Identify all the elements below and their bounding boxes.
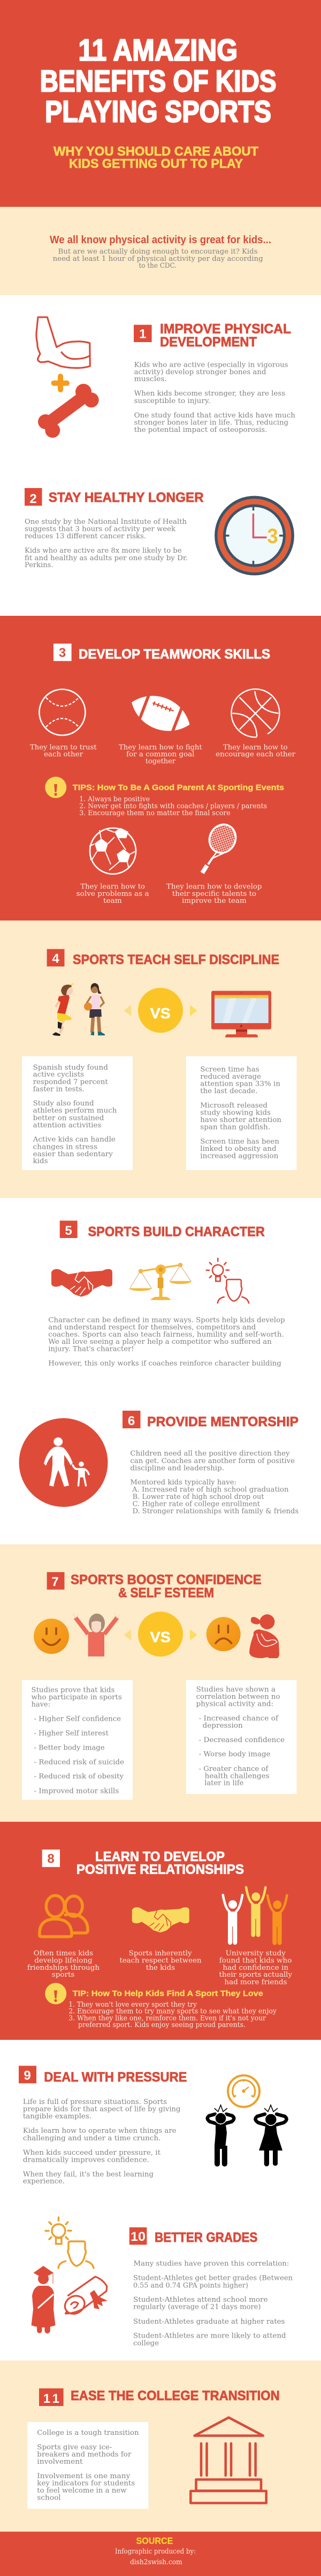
card: sports facts: responded 7 percent bbox=[33, 1078, 108, 1086]
number badge 4: 4 bbox=[52, 952, 59, 966]
card: screen time facts: span than goldfish. bbox=[200, 1124, 270, 1131]
intro text: need at least 1 hour of physical activity per day according bbox=[53, 255, 263, 263]
icon: diploma bbox=[62, 2277, 108, 2317]
number badge 3: 3 bbox=[59, 646, 66, 660]
text block 10: Many studies have proven this correlation: bbox=[134, 2260, 289, 2268]
number badge 6 bbox=[123, 1411, 140, 1428]
captions: teach respect between bbox=[120, 1956, 202, 1964]
heading 7: SPORTS BOOST CONFIDENCE bbox=[71, 1572, 262, 1587]
card: college facts bbox=[27, 2422, 148, 2509]
captions row 2 bbox=[77, 883, 262, 905]
text block 10: Student-Athletes graduate at higher rates bbox=[133, 2318, 285, 2326]
number badge 7 bbox=[47, 1572, 64, 1590]
number badge 8 bbox=[42, 1850, 60, 1867]
card: sports facts: attention activities bbox=[33, 1121, 101, 1130]
source credit: dish2swish.com bbox=[130, 2558, 182, 2566]
icon: tip alert bbox=[45, 1983, 66, 2005]
icon: college building bbox=[190, 2417, 266, 2503]
number badge 1: 1 bbox=[139, 327, 146, 341]
icon: baseball bbox=[39, 690, 85, 736]
text block 6: D. Stronger relationships with family & friends bbox=[133, 1507, 299, 1515]
text block 10: 0.55 and 0.74 GPA points higher) bbox=[133, 2281, 248, 2289]
number badge 5: 5 bbox=[65, 1224, 72, 1238]
icon: plus bbox=[54, 376, 67, 390]
VS badge bbox=[138, 988, 183, 1033]
captions row 2: team bbox=[103, 897, 122, 905]
icon: girl with ball bbox=[84, 983, 105, 1035]
card: college facts: breakers and methods for bbox=[37, 2450, 132, 2458]
number badge 10 bbox=[129, 2227, 147, 2245]
captions bbox=[27, 1950, 293, 1986]
text block 2: One study by the National Institute of Health bbox=[25, 518, 187, 526]
icon: stressed man bbox=[208, 2105, 234, 2167]
heading 6: PROVIDE MENTORSHIP bbox=[147, 1414, 299, 1429]
card: sports facts: changes in stress bbox=[33, 1143, 97, 1151]
text block 5: We all love seeing a player help a competitor who suffered an bbox=[48, 1338, 272, 1346]
icon: handshake bbox=[132, 1907, 189, 1932]
heading 3: DEVELOP TEAMWORK SKILLS bbox=[79, 647, 270, 662]
number badge 2: 2 bbox=[29, 492, 37, 506]
number badge 9 bbox=[19, 2066, 36, 2083]
captions row 2: They learn how to develop bbox=[166, 883, 262, 891]
icon: handshake bbox=[51, 1269, 112, 1297]
icon: pressure gauge bbox=[228, 2075, 259, 2107]
text block 5: However, this only works if coaches reinforce character building bbox=[48, 1360, 281, 1367]
panel: section 4 self discipline bbox=[0, 920, 321, 1198]
captions row 1: encourage each other bbox=[216, 751, 296, 759]
icon: cheering group bbox=[223, 1887, 287, 1945]
icon: clock bbox=[215, 496, 294, 575]
icon: running boy bbox=[52, 984, 73, 1036]
text block 10: regularly (average of 21 days more) bbox=[133, 2303, 261, 2311]
captions row 1: They learn how to fight bbox=[119, 744, 202, 752]
text block 5: coaches. Sports can also teach fairness, humility and self-worth. bbox=[48, 1330, 284, 1339]
icon: balance scales bbox=[129, 1263, 192, 1300]
heading 8 bbox=[77, 1850, 244, 1877]
text block 10: Student-Athletes attend school more bbox=[133, 2296, 268, 2304]
text block 9: tangible examples. bbox=[23, 2113, 91, 2121]
text block 6: can get. Coaches are another form of positive bbox=[130, 1457, 295, 1465]
icon: american football bbox=[125, 684, 196, 742]
subtitle: WHY YOU SHOULD CARE ABOUT bbox=[54, 144, 258, 159]
title: BENEFITS OF KIDS bbox=[40, 64, 277, 98]
panel: section 3 teamwork skills bbox=[0, 616, 321, 920]
card: inactivity risks: health challenges bbox=[205, 1772, 270, 1780]
tips heading: TIPS: How To Be A Good Parent At Sporting Events bbox=[73, 783, 284, 792]
text block 9: experience. bbox=[23, 2178, 65, 2186]
text block 9: challenging and under a time crunch. bbox=[23, 2134, 160, 2142]
icon: sad face bbox=[207, 1617, 241, 1651]
captions row 2: They learn how to bbox=[80, 883, 145, 891]
text block 6: Children need all the positive direction they bbox=[130, 1450, 290, 1458]
icon: flexed arm bbox=[36, 317, 90, 368]
card: sports benefits: - Reduced risk of suicide bbox=[34, 1758, 124, 1766]
VS badge: VS bbox=[150, 1629, 171, 1645]
text block 10: Student-Athletes get better grades (Between bbox=[133, 2275, 293, 2283]
text block 9: When kids succeed under pressure, it bbox=[23, 2149, 161, 2157]
card: college facts: Involvement is one many bbox=[37, 2472, 131, 2480]
card: screen time facts: have shorter attention bbox=[200, 1116, 282, 1124]
card: inactivity risks: - Decreased confidence bbox=[199, 1736, 285, 1744]
text block 1: the potential impact of osteoporosis. bbox=[134, 426, 267, 434]
icon: bone bbox=[38, 384, 99, 438]
card: college facts: Sports give easy ice- bbox=[37, 2443, 112, 2451]
card: inactivity risks: Studies have shown a bbox=[196, 1686, 276, 1694]
text block 1: One study found that active kids have much bbox=[134, 412, 296, 420]
tip heading: TIP: How To Help Kids Find A Sport They Love bbox=[73, 1989, 263, 1998]
card: sports facts bbox=[22, 1056, 133, 1170]
tips list: 1. Always be positive bbox=[79, 795, 150, 803]
icon: monitor bbox=[211, 991, 271, 1038]
captions row 2: their specific talents to bbox=[172, 890, 256, 898]
captions row 1: They learn to trust bbox=[30, 744, 97, 752]
icon: idea head bbox=[207, 1258, 249, 1303]
captions: had more friends bbox=[224, 1978, 287, 1986]
text block 9: prepare kids for that aspect of life by giving bbox=[23, 2105, 181, 2114]
text block 5: injury. That's character! bbox=[48, 1345, 134, 1353]
card: college facts: to feel welcome in a new bbox=[37, 2487, 127, 2495]
intro heading: We all know physical activity is great for kids... bbox=[50, 234, 271, 246]
tip list: preferred sport. Kids enjoy seeing proud parents. bbox=[78, 2021, 246, 2029]
card: sports benefits: - Reduced risk of obesity bbox=[34, 1773, 124, 1781]
text block 9: dramatically improves confidence. bbox=[23, 2156, 149, 2164]
card: college facts: key indicators for students bbox=[37, 2479, 135, 2488]
intro text: to the CDC. bbox=[139, 262, 177, 270]
panel: section 8 relationships bbox=[0, 1822, 321, 2040]
arrow: right bbox=[190, 1005, 197, 1016]
heading 1 bbox=[160, 322, 291, 350]
card: sports facts: Spanish study found bbox=[33, 1064, 108, 1072]
card: sports benefits: have: bbox=[31, 1700, 50, 1708]
captions: found that kids who bbox=[219, 1956, 292, 1964]
number badge 7: 7 bbox=[51, 1575, 59, 1589]
VS badge: VS bbox=[150, 1005, 171, 1022]
icon: crouching person bbox=[249, 1614, 279, 1658]
card: screen time facts: increased aggression bbox=[200, 1152, 279, 1160]
text block 9: When they fail, it's the best learning bbox=[23, 2170, 154, 2178]
icon: cheering girl bbox=[73, 1613, 120, 1657]
text block 2: fit and healthy as adults per one study by Dr. bbox=[25, 554, 188, 562]
captions row 1: They learn how to bbox=[223, 744, 288, 752]
panel: sections 5 and 6 bbox=[0, 1198, 321, 1544]
card: screen time facts: reduced average bbox=[200, 1073, 261, 1081]
icon: graduate bbox=[31, 2266, 56, 2333]
card: screen time facts bbox=[186, 1056, 296, 1170]
tips list: 3. Encourage them no matter the final score bbox=[79, 809, 231, 817]
card: sports benefits: - Improved motor skills bbox=[34, 1788, 119, 1795]
number badge 6: 6 bbox=[128, 1414, 135, 1428]
captions row 1: together bbox=[146, 757, 176, 765]
text block 6: C. Higher rate of college enrollment bbox=[133, 1500, 261, 1508]
captions: Sports inherently bbox=[129, 1950, 192, 1958]
icon: soccer ball bbox=[89, 828, 136, 874]
VS badge bbox=[138, 1612, 183, 1657]
text block 6 bbox=[130, 1450, 299, 1515]
number badge 11: 11 bbox=[43, 2392, 59, 2406]
captions: friendships through bbox=[27, 1964, 100, 1972]
number badge 9: 9 bbox=[24, 2069, 31, 2083]
text block 1: stronger bones later in life. Thus, reducing bbox=[134, 419, 288, 427]
tips list: 2. Never get into fights with coaches / players / parents bbox=[79, 802, 267, 810]
number badge 10: 10 bbox=[131, 2230, 146, 2244]
icon: basketball bbox=[231, 689, 279, 737]
icon: tennis racket bbox=[202, 820, 240, 873]
card: sports facts: kids bbox=[33, 1157, 48, 1165]
text block 1: Kids who are active (especially in vigorous bbox=[134, 361, 288, 369]
number badge 8: 8 bbox=[47, 1852, 55, 1866]
card: inactivity risks: - Increased chance of bbox=[199, 1715, 279, 1723]
text block 10: Student-Athletes are more likely to attend bbox=[133, 2332, 286, 2340]
text block 2: Kids who are active are 8x more likely to be bbox=[25, 547, 182, 555]
text block 1 bbox=[134, 361, 296, 434]
title bbox=[40, 33, 277, 129]
icon: adult and child bbox=[19, 1418, 108, 1507]
captions: develop lifelong bbox=[34, 1956, 93, 1964]
card: screen time facts: Microsoft released bbox=[200, 1102, 268, 1110]
heading 8: LEARN TO DEVELOP bbox=[95, 1850, 225, 1865]
number badge 1 bbox=[134, 325, 152, 342]
tips list bbox=[79, 795, 267, 817]
captions row 1: each other bbox=[44, 751, 83, 759]
heading 11: EASE THE COLLEGE TRANSITION bbox=[71, 2388, 280, 2403]
text block 2: Perkins. bbox=[25, 561, 54, 569]
card: screen time facts: Screen time has been bbox=[200, 1138, 280, 1146]
card: screen time facts: attention span 33% in bbox=[200, 1080, 281, 1088]
card: screen time facts: linked to obesity and bbox=[200, 1145, 277, 1153]
panel: section 7 confidence bbox=[0, 1544, 321, 1822]
card: sports benefits: - Higher Self confidence bbox=[34, 1715, 121, 1723]
captions: Often times kids bbox=[34, 1950, 93, 1958]
text block 1: muscles. bbox=[134, 375, 167, 383]
text block 1: susceptible to injury. bbox=[134, 397, 210, 405]
number badge 3 bbox=[54, 644, 72, 661]
card: sports benefits: Studies prove that kids bbox=[31, 1687, 114, 1695]
heading 10: BETTER GRADES bbox=[155, 2230, 257, 2245]
source heading: SOURCE bbox=[136, 2535, 173, 2546]
card: sports facts: active cyclists bbox=[33, 1071, 84, 1079]
text block 5: and understand respect for themselves, competitors and bbox=[48, 1324, 256, 1332]
icon: idea head bbox=[45, 2217, 94, 2268]
text block 5: Character can be defined in many ways. Sports help kids develop bbox=[48, 1317, 285, 1325]
captions row 2: improve the team bbox=[182, 897, 247, 905]
heading 5: SPORTS BUILD CHARACTER bbox=[88, 1224, 265, 1239]
card: inactivity risks: correlation between no bbox=[196, 1693, 280, 1701]
heading 7 bbox=[71, 1572, 262, 1600]
text block 6: discipline and leadership. bbox=[130, 1464, 224, 1472]
card: sports benefits bbox=[22, 1680, 133, 1800]
icon: stressed woman bbox=[255, 2105, 287, 2167]
heading 1: IMPROVE PHYSICAL bbox=[160, 322, 291, 337]
title: PLAYING SPORTS bbox=[45, 95, 271, 129]
captions: the kids bbox=[146, 1964, 175, 1972]
text block 2 bbox=[25, 518, 188, 569]
card: inactivity risks: physical activity and: bbox=[196, 1700, 273, 1708]
icon: clock: 3 bbox=[267, 525, 278, 548]
text block 1: When kids become stronger, they are less bbox=[134, 390, 285, 398]
number badge 5 bbox=[60, 1221, 78, 1238]
text block 6: Mentored kids typically have: bbox=[130, 1479, 236, 1487]
title: 11 AMAZING bbox=[78, 33, 238, 67]
text block 1: activity) develop stronger bones and bbox=[134, 368, 266, 376]
card: inactivity risks: - Worse body image bbox=[199, 1751, 271, 1759]
card: college facts: involvement bbox=[37, 2458, 83, 2466]
number badge 4 bbox=[47, 949, 64, 966]
tip list: 1. They won't love every sport they try bbox=[68, 2001, 197, 2009]
subtitle bbox=[54, 144, 258, 171]
text block 2: reduces 13 different cancer risks. bbox=[25, 532, 146, 540]
panel: intro bbox=[0, 207, 321, 295]
card: screen time facts: Screen time has bbox=[200, 1066, 259, 1073]
text block 9: Kids learn how to operate when things are bbox=[23, 2127, 177, 2135]
captions: had confidence in bbox=[223, 1964, 289, 1972]
card: screen time facts: study showing kids bbox=[200, 1109, 271, 1117]
source credit bbox=[115, 2548, 196, 2566]
heading 7: & SELF ESTEEM bbox=[118, 1585, 214, 1600]
number badge 11 bbox=[39, 2388, 64, 2406]
captions: their sports actually bbox=[219, 1971, 293, 1979]
card: college facts: College is a tough transition bbox=[37, 2429, 139, 2437]
card: inactivity risks: - Greater chance of bbox=[199, 1765, 269, 1773]
heading 1: DEVELOPMENT bbox=[160, 335, 257, 350]
captions row 1 bbox=[30, 744, 296, 765]
intro text bbox=[53, 248, 263, 270]
number badge 2 bbox=[25, 488, 42, 506]
text block 9: Life is full of pressure situations. Sports bbox=[23, 2098, 167, 2106]
text block 9 bbox=[23, 2098, 181, 2186]
card: inactivity risks: depression bbox=[202, 1722, 243, 1730]
heading 8: POSITIVE RELATIONSHIPS bbox=[77, 1862, 244, 1877]
heading 9: DEAL WITH PRESSURE bbox=[44, 2070, 187, 2085]
tip list: 3. When they like one, reinforce them. Even if it's not your bbox=[68, 2014, 266, 2023]
text block 2: suggests that 3 hours of activity per week bbox=[25, 525, 175, 533]
source credit: Infographic produced by: bbox=[115, 2548, 196, 2556]
card: screen time facts: the last decade. bbox=[200, 1087, 257, 1095]
card: inactivity risks: later in life bbox=[204, 1780, 244, 1788]
card: sports facts: better on sustained bbox=[33, 1114, 104, 1123]
card: sports facts: easier than sedentary bbox=[33, 1150, 113, 1158]
captions row 1: for a common goal bbox=[126, 751, 195, 759]
captions: University study bbox=[226, 1950, 286, 1958]
icon: two friends bbox=[40, 1896, 88, 1937]
icon: tips alert bbox=[45, 777, 66, 798]
text block 10 bbox=[133, 2260, 293, 2348]
card: sports facts: Active kids can handle bbox=[33, 1136, 116, 1144]
card: sports benefits: - Higher Self interest bbox=[34, 1729, 109, 1737]
card: sports facts: athletes perform much bbox=[33, 1107, 117, 1115]
captions: sports bbox=[52, 1971, 74, 1979]
panel: sections 9 and 10 bbox=[0, 2040, 321, 2361]
tip list bbox=[68, 2001, 277, 2029]
text block 10: college bbox=[133, 2339, 159, 2348]
arrow: right bbox=[190, 1629, 197, 1641]
panel: section 11 college transition bbox=[0, 2361, 321, 2532]
panel: footer bbox=[0, 2532, 321, 2576]
card: sports facts: faster in tests. bbox=[33, 1085, 85, 1094]
captions row 2: solve problems as a bbox=[77, 890, 149, 898]
text block 6: B. Lower rate of high school drop out bbox=[133, 1493, 264, 1501]
text block 6: A. Increased rate of high school graduation bbox=[132, 1486, 289, 1494]
panel: header bbox=[0, 0, 321, 207]
card: sports benefits: - Better body image bbox=[34, 1744, 105, 1752]
card: college facts: school bbox=[37, 2494, 61, 2502]
heading 2: STAY HEALTHY LONGER bbox=[49, 490, 204, 505]
text block 5 bbox=[48, 1317, 285, 1367]
card: sports facts: Study also found bbox=[33, 1100, 94, 1108]
icon: smiley bbox=[34, 1619, 69, 1654]
card: sports benefits: who participate in sports bbox=[31, 1693, 122, 1701]
arrow: left bbox=[124, 1629, 131, 1641]
panel: section 1 improve physical development bbox=[0, 295, 321, 616]
subtitle: KIDS GETTING OUT TO PLAY bbox=[69, 157, 243, 171]
intro text: But are we actually doing enough to encourage it? Kids bbox=[58, 248, 257, 256]
heading 4: SPORTS TEACH SELF DISCIPLINE bbox=[73, 953, 279, 968]
tip list: 2. Encourage them to try many sports to see what they enjoy bbox=[68, 2008, 277, 2016]
arrow: left bbox=[124, 1005, 131, 1016]
card: inactivity risks bbox=[186, 1680, 296, 1794]
